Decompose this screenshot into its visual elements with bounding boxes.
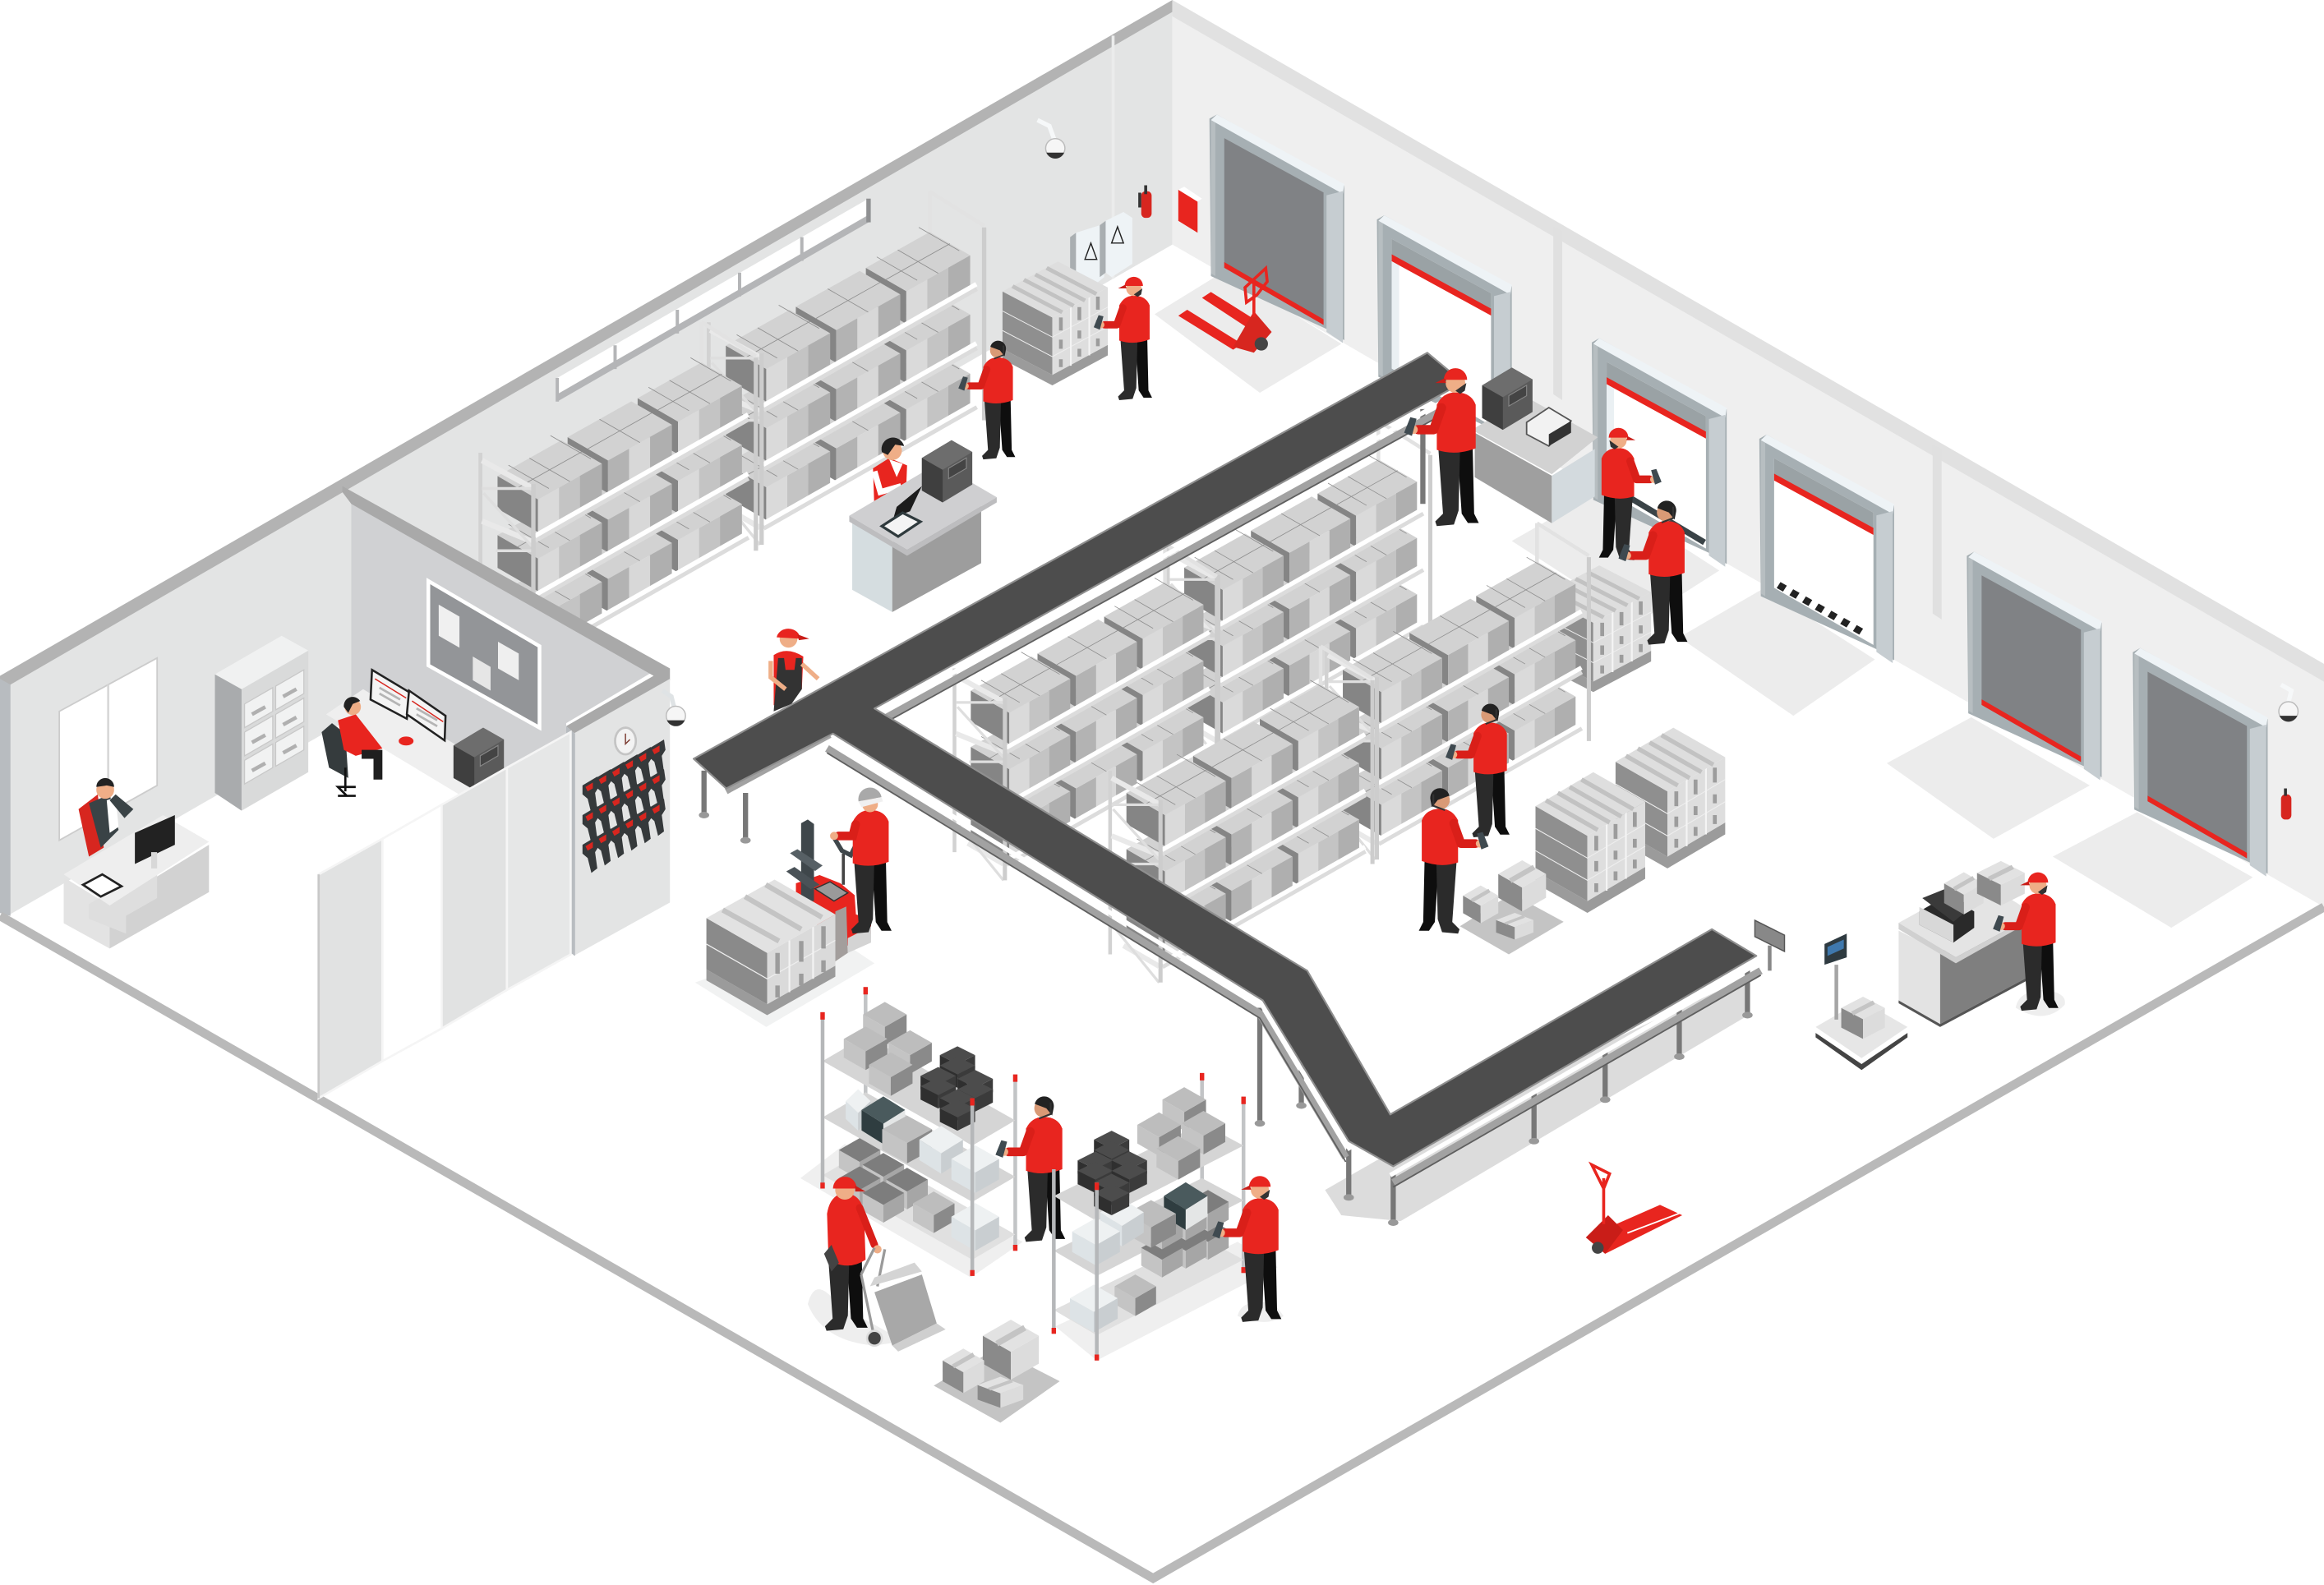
manager desk top xyxy=(64,815,209,905)
red wall panel xyxy=(1178,187,1202,233)
worker in vest at rear counter xyxy=(871,438,907,518)
pallet truck by door 1 xyxy=(1178,268,1271,352)
shadow under trolley worker xyxy=(808,1289,904,1346)
pallet stack at end of rack xyxy=(1542,565,1651,692)
terminal at conveyor end xyxy=(1755,920,1785,970)
pad under forklift pallet xyxy=(695,933,874,1027)
pallet stacker xyxy=(786,819,871,961)
camera on office xyxy=(662,691,685,726)
fire extinguisher left xyxy=(1140,185,1151,218)
female worker with scanner between shelves xyxy=(995,1096,1065,1242)
monitor on manager desk xyxy=(135,815,175,869)
notice board xyxy=(428,581,539,728)
printer on rear counter xyxy=(922,440,972,502)
dock door 6 closed xyxy=(2133,648,2267,877)
worker on stacker with hard hat xyxy=(830,787,892,933)
conveyor shadow xyxy=(1325,978,1746,1221)
worker at conveyor top xyxy=(1404,368,1479,526)
office window xyxy=(59,658,157,841)
conveyor legs xyxy=(704,409,1747,1223)
pallet behind back racks xyxy=(1003,261,1108,385)
dock door 5 closed xyxy=(1967,551,2101,780)
scanner rack xyxy=(583,740,666,873)
glass sliding doors xyxy=(319,732,570,1098)
pallet stacks right of racks xyxy=(1535,728,1725,913)
dock door 2 open xyxy=(1377,215,1512,444)
pallet at forklift xyxy=(707,879,835,1015)
dock door 1 closed xyxy=(1210,114,1344,343)
ceiling camera back wall xyxy=(1037,120,1065,159)
shadow at desk worker xyxy=(2016,990,2065,1016)
floor border xyxy=(0,907,2324,1578)
clipboard held at counter xyxy=(894,486,922,517)
tablet on rear counter xyxy=(882,513,920,537)
shelf unit left xyxy=(800,987,1022,1278)
rack rows, centre back xyxy=(955,421,1430,880)
red button on desk xyxy=(399,736,413,745)
desk printer xyxy=(454,728,504,790)
wall: back right xyxy=(1173,0,2324,907)
worker in overalls behind conveyor xyxy=(771,629,818,712)
scanner desk by conveyor xyxy=(1472,367,1598,523)
laser printer on weighing desk xyxy=(1920,889,1974,942)
worker scanning right shelf xyxy=(1212,1176,1281,1322)
shelf unit right xyxy=(1054,1073,1278,1361)
dock door 3 open xyxy=(1592,339,1727,567)
worker with headset at door 3 xyxy=(1618,500,1687,645)
high window strip on back wall xyxy=(557,199,869,402)
floor scale xyxy=(1815,933,1907,1070)
seated operator xyxy=(321,697,382,796)
manager desk xyxy=(64,845,209,948)
conveyor side rails xyxy=(726,389,1761,1187)
dock door 4 open with hazard stripes xyxy=(1759,435,1894,663)
conveyor feet xyxy=(699,812,1753,1226)
fire extinguisher right xyxy=(2281,789,2291,819)
pallet truck on floor xyxy=(1586,1165,1682,1254)
office end wall with tool rack xyxy=(566,679,670,956)
office wall: partition xyxy=(343,486,670,837)
female worker by back rack xyxy=(958,341,1015,459)
electrical cabinets xyxy=(1070,212,1132,289)
worker with headset by rack xyxy=(1446,703,1510,837)
L-shaped office desk xyxy=(326,689,511,867)
file cabinet xyxy=(215,636,308,811)
parcels on weighing desk xyxy=(1944,861,2025,915)
rear counter xyxy=(849,463,997,612)
floor pads in front of dock doors xyxy=(1155,271,2253,928)
small pallet front xyxy=(934,1320,1060,1422)
small pallet near racks xyxy=(1460,860,1564,955)
shadow at right shelf worker xyxy=(1238,1302,1284,1322)
dual monitors xyxy=(371,670,445,740)
worker scanning at door 3 xyxy=(1599,428,1662,560)
worker with hand truck xyxy=(824,1177,946,1352)
camera right wall xyxy=(2279,684,2298,721)
manager seated xyxy=(79,778,133,857)
wall: back left xyxy=(0,0,1173,916)
rack rows, front xyxy=(1110,523,1589,983)
racks along the back wall xyxy=(481,191,984,675)
weighing desk xyxy=(1898,879,2035,1027)
conveyor belt xyxy=(694,352,1756,1166)
rail bar through door 3 xyxy=(1616,489,1704,542)
notebook on manager desk xyxy=(83,874,122,896)
worker with scanner at back pallet xyxy=(1094,277,1152,400)
wall clock xyxy=(615,728,636,754)
worker at weighing desk xyxy=(1993,873,2059,1011)
worker with mobile computer xyxy=(1419,788,1488,933)
